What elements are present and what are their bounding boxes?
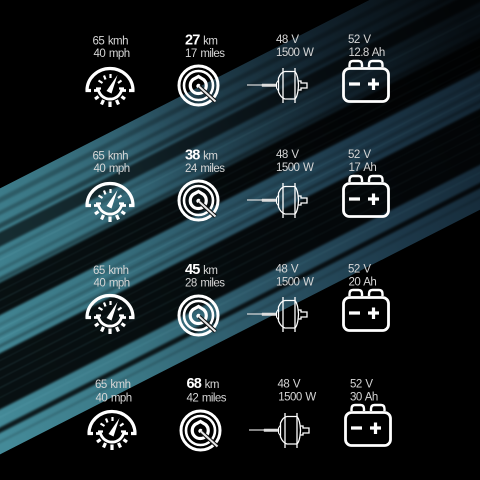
motor text: 48 V	[276, 34, 299, 46]
motor text: 1500 W	[276, 276, 314, 288]
range text: 68	[186, 376, 202, 392]
icon: hub motor	[247, 297, 307, 332]
speed text: 40 mph	[94, 278, 130, 290]
icon: hub motor	[247, 183, 307, 218]
range text: 17 miles	[185, 48, 225, 60]
range text: 28 miles	[185, 278, 225, 290]
motor text: 48 V	[278, 378, 301, 390]
row 4: 68 km model	[88, 376, 390, 450]
motor text: 1500 W	[276, 47, 314, 59]
battery text: 12.8 Ah	[348, 47, 385, 59]
row 2: 38 km model	[86, 148, 388, 222]
battery text: 52 V	[348, 264, 371, 276]
motor text: 1500 W	[278, 392, 316, 404]
range text: 38	[185, 148, 200, 164]
speed text: 65 kmh	[92, 36, 128, 48]
icon: speedometer gear	[86, 184, 134, 222]
icon: range target	[179, 296, 218, 335]
battery text: 17 Ah	[348, 162, 376, 174]
speed text: 40 mph	[96, 392, 132, 404]
range text: km	[200, 265, 217, 277]
range text: km	[201, 379, 219, 391]
speed text: 40 mph	[94, 163, 130, 175]
row 1: 27 km model	[86, 32, 388, 107]
speed text: 65 kmh	[95, 379, 131, 391]
icon: speedometer gear	[88, 412, 136, 450]
icon: battery	[344, 176, 388, 216]
icon: range target	[179, 181, 218, 220]
icon: hub motor	[247, 68, 307, 103]
range text: km	[200, 150, 217, 162]
icon: battery	[344, 61, 388, 102]
motor text: 1500 W	[276, 162, 314, 174]
motor text: 48 V	[276, 149, 299, 161]
icon: battery	[344, 290, 388, 330]
battery text: 52 V	[348, 34, 371, 46]
speed text: 65 kmh	[93, 265, 129, 277]
battery text: 52 V	[348, 149, 371, 161]
icon: speedometer gear	[86, 296, 134, 334]
motor text: 48 V	[276, 264, 299, 276]
speed text: 40 mph	[94, 48, 130, 60]
range text: 24 miles	[185, 163, 225, 175]
icon: range target	[181, 411, 220, 450]
range text: 42 miles	[186, 392, 227, 404]
icon: battery	[346, 405, 390, 446]
range text: km	[200, 36, 217, 48]
battery text: 30 Ah	[350, 392, 378, 404]
row 3: 45 km model	[86, 262, 388, 335]
icon: hub motor	[249, 413, 309, 448]
icon: speedometer gear	[86, 68, 134, 107]
battery text: 52 V	[350, 378, 373, 390]
battery text: 20 Ah	[348, 276, 376, 288]
icon: range target	[179, 66, 218, 105]
range text: 45	[185, 262, 200, 278]
range text: 27	[185, 32, 200, 48]
speed text: 65 kmh	[92, 150, 128, 162]
